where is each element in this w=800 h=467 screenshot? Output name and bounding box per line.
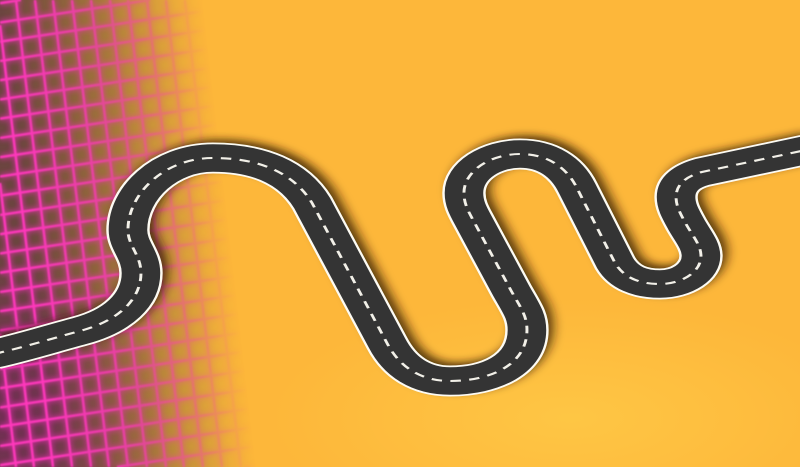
- road drop shadow: [0, 146, 800, 377]
- road white edge lines: [0, 150, 800, 381]
- winding road: [0, 150, 800, 381]
- road centre dashed line: [0, 150, 800, 381]
- background: dark shaded neon grid panel: [0, 0, 250, 467]
- road asphalt: [0, 150, 800, 381]
